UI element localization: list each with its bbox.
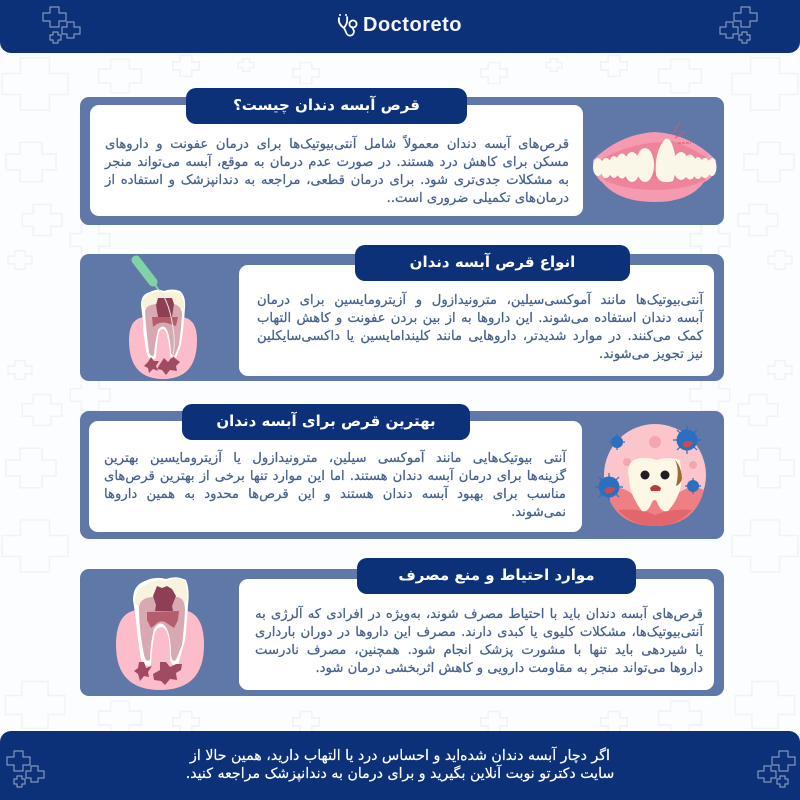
icon: tooth root with endodontic file [129,256,197,379]
text block: panel 2: آنتی‌بیوتیک‌ها مانند آموکسی‌سیلین، مترونیدازول و آزیترومایسین برای درمان [257,293,703,308]
text box: panel 4 [239,579,714,690]
icon: gums and teeth [593,122,716,202]
text block: panel 4: آنتی‌بیوتیک‌ها، مشکلات کلیوی یا کبدی دارند. مصرف این داروها در دوران بارداری [255,625,703,640]
text block: panel 4: یا شیردهی باید تنها با مشورت پزشک انجام شود. همچنین، مصرف نادرست [255,643,703,658]
icon: stethoscope logo [338,14,358,36]
icon: crosses footer left [6,750,45,788]
heading: panel 1 [186,88,467,124]
heading: panel 1: قرص آبسه دندان چیست؟ [233,96,420,114]
logo wordmark: Doctoreto [363,14,462,36]
heading: panel 2: انواع قرص آبسه دندان [410,253,575,271]
text block: panel 3: آنتی بیوتیک‌هایی مانند آموکسی سیلین، مترونیدازول یا آزیترومایسین بهترین [104,451,566,466]
text block: panel 1 [104,135,569,206]
panel: types of tablets [80,254,724,381]
icon: sad tooth with bacteria [595,424,706,526]
text block: panel 3: نمی‌شوند. [511,505,566,520]
icon: crosses right [719,6,758,44]
heading: panel 2 [355,245,630,281]
text block: panel 3: گزینه‌ها برای درمان آبسه دندان هستند. اما این موارد تنها برخی از بهترین قرص‌های [104,469,566,484]
call to action text [186,746,614,782]
heading: panel 4: موارد احتیاط و منع مصرف [398,566,595,584]
text block: panel 4: داروها می‌تواند منجر به مقاومت دارویی و کاهش اثربخشی درمان شود. [315,661,703,676]
text block: panel 3: مناسب برای بهبود آبسه دندان هستند و این قرص‌ها محدود به همین داروها [104,487,566,502]
text block: panel 1: درمان‌های تکمیلی ضروری است.. [387,191,569,206]
heading: panel 4 [357,558,636,594]
text block: panel 2: نیز تجویز می‌شوند. [599,347,703,362]
text block: panel 1: قرص‌های آبسه دندان معمولاً شامل آنتی‌بیوتیک‌ها برای درمان عفونت و داروهای [105,137,569,152]
heading: panel 3: بهترین قرص برای آبسه دندان [216,412,436,430]
text block: panel 2: آبسه دندان استفاده می‌شوند. این داروها به از بین بردن عفونت و کاهش التهاب [257,311,703,326]
header banner [0,0,800,53]
text box: panel 1 [90,105,583,216]
footer banner [0,731,800,800]
text block: panel 2 [257,291,704,362]
panel: precautions [80,569,724,696]
call to action text: سایت دکترتو نوبت آنلاین بگیرید و برای درمان به دندانپزشک مراجعه کنید. [186,766,614,782]
panel: best tablets [80,411,724,539]
text box: panel 2 [239,265,714,376]
text block: panel 4: قرص‌های آبسه دندان باید با احتیاط مصرف شوند، به‌ویژه در افرادی که آلرژی به [255,607,703,622]
panel: what is abscess tablet [80,97,724,225]
text box: panel 3 [89,421,582,532]
icon: crosses footer right [757,750,796,788]
heading: panel 3 [182,404,470,440]
text block: panel 3 [104,449,567,520]
icon: crosses left [42,6,81,44]
call to action text: اگر دچار آبسه دندان شده‌اید و احساس درد یا التهاب دارید، همین حالا از [190,748,610,764]
text block: panel 1: به مشکلات جدی‌تری شود. برای درمان قطعی، مراجعه به دندانپزشک و استفاده از [105,173,569,188]
text block: panel 2: کمک می‌کنند. در موارد شدیدتر، داروهایی مانند کلیندامایسین یا داکسی‌سایکلین [257,329,703,344]
text block: panel 1: مسکن برای کاهش درد هستند. در صورت عدم درمان به موقع، آبسه می‌تواند منجر [105,155,569,170]
text block: panel 4 [255,605,704,676]
